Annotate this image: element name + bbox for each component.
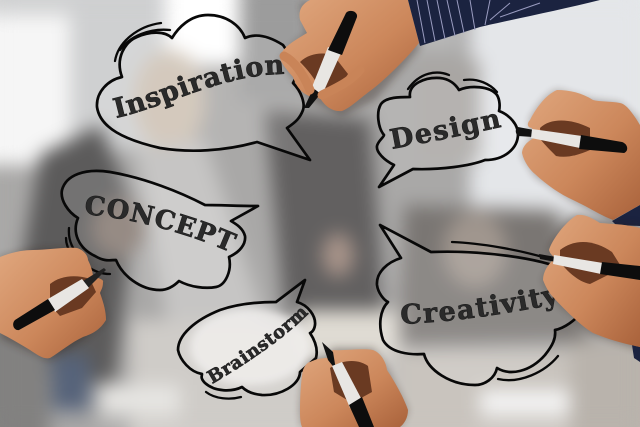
sleeve xyxy=(612,205,640,226)
hand with marker: bottom xyxy=(300,342,408,427)
label: Creativity: Creativity xyxy=(401,289,555,324)
label: Brainstorm: Brainstorm xyxy=(206,308,309,384)
sleeve xyxy=(408,0,600,46)
speech bubble: Design xyxy=(376,71,520,188)
hand with marker: left xyxy=(0,248,106,360)
speech bubble: Inspiration xyxy=(96,14,312,162)
hand xyxy=(543,215,640,347)
speech bubble: Brainstorm xyxy=(176,278,318,400)
marker xyxy=(539,254,640,280)
fingers and thumb xyxy=(284,56,360,95)
hand with marker: top xyxy=(280,0,600,116)
speech bubble: Creativity xyxy=(376,224,576,386)
hand xyxy=(300,349,408,427)
sleeve xyxy=(632,345,640,362)
label: Design: Design xyxy=(389,114,502,150)
marker xyxy=(322,342,374,427)
hand xyxy=(0,248,106,358)
label: CONCEPT: CONCEPT xyxy=(86,196,238,251)
marker xyxy=(13,268,106,330)
marker xyxy=(304,11,357,108)
label: Inspiration: Inspiration xyxy=(112,58,284,118)
hand xyxy=(280,0,419,111)
marker xyxy=(516,127,627,153)
hand with marker: lower right xyxy=(539,215,640,362)
speech bubble: Concept xyxy=(60,170,260,292)
lighter patch inside brainstorm bubble xyxy=(190,309,310,385)
hand with marker: upper right xyxy=(516,90,640,226)
hand xyxy=(522,90,640,220)
